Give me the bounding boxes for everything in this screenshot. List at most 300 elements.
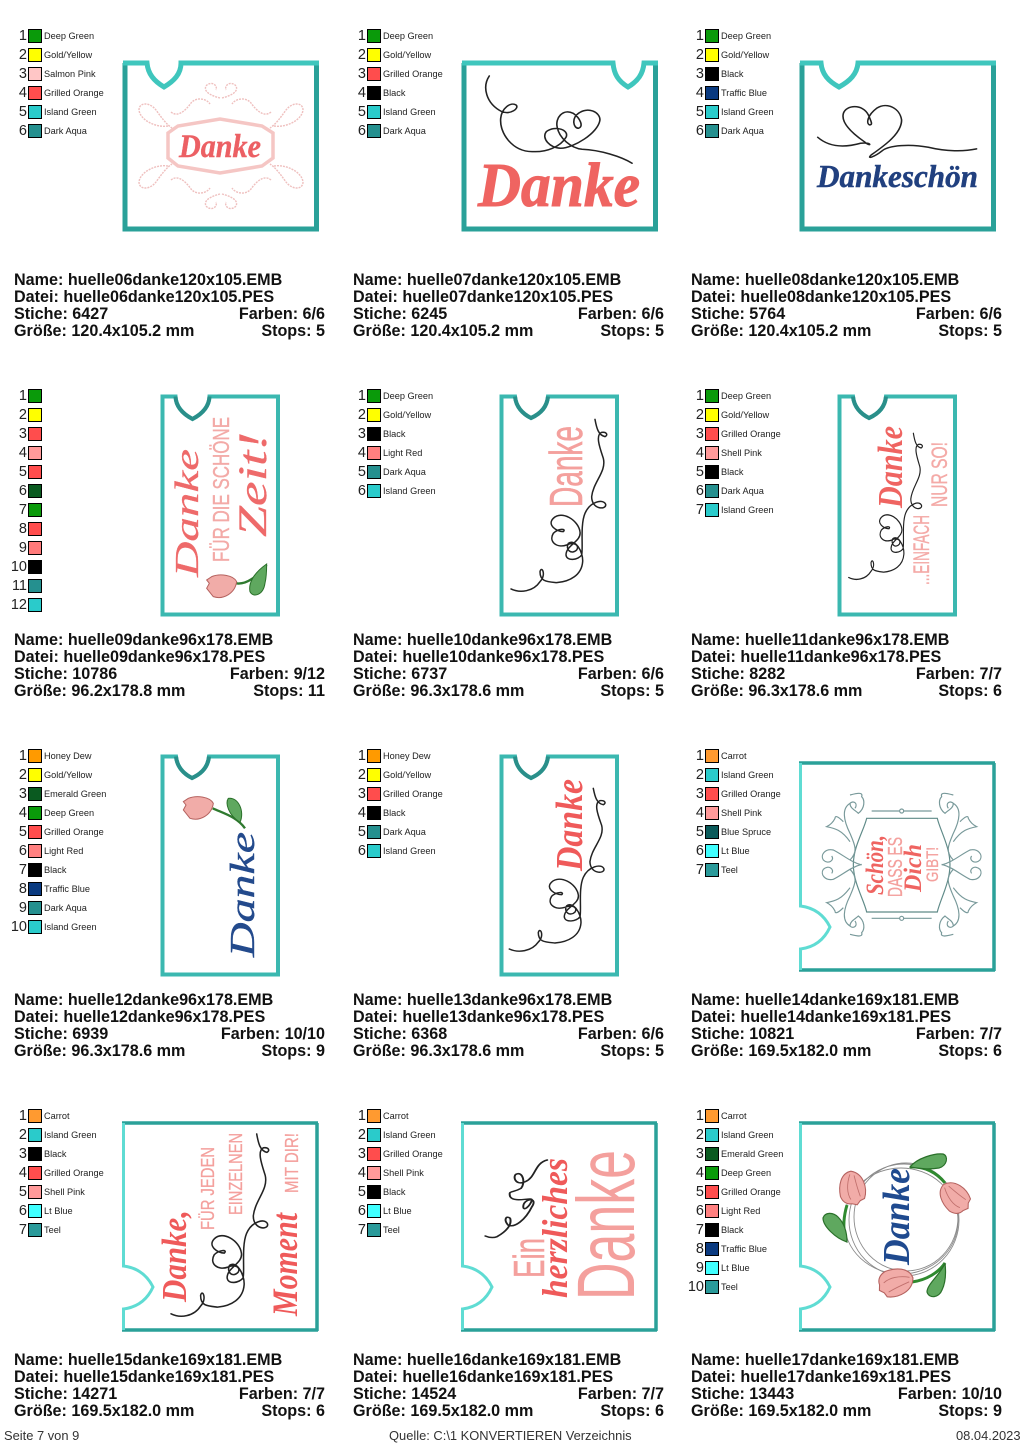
word: Danke,: Danke, xyxy=(155,1210,194,1303)
panel: huelle07danke120x105 xyxy=(353,28,664,340)
file information: Datei: huelle08danke120x105.PES xyxy=(691,288,951,306)
colour legend: Black xyxy=(383,808,405,818)
wreath stems xyxy=(844,1167,945,1282)
file information xyxy=(691,271,1002,340)
pocket frame xyxy=(461,1123,657,1331)
wreath leaves xyxy=(823,1154,946,1297)
word: Danke: Danke xyxy=(876,1168,918,1266)
text: EINZELNEN: EINZELNEN xyxy=(226,1133,246,1215)
file information: Farben: 9/12 xyxy=(230,665,325,683)
colour legend: 8 xyxy=(19,881,27,897)
file information: Größe: 96.3x178.6 mm xyxy=(353,682,524,700)
pocket frame xyxy=(502,756,617,974)
colour legend: Black xyxy=(44,1149,66,1159)
colour legend: Gold/Yellow xyxy=(721,410,769,420)
file information: Stops: 6 xyxy=(261,1402,325,1420)
file information: Datei: huelle09danke96x178.PES xyxy=(14,648,265,666)
file information: Größe: 120.4x105.2 mm xyxy=(353,322,533,340)
colour legend: 3 xyxy=(19,66,27,82)
colour legend: Dark Aqua xyxy=(44,903,87,913)
colour legend: Light Red xyxy=(44,846,83,856)
file information: Farben: 7/7 xyxy=(578,1385,664,1403)
wreath rings xyxy=(844,1163,959,1276)
embroidery design: Danke with squiggle xyxy=(500,394,619,616)
colour legend: 4 xyxy=(358,85,366,101)
ornament flourishes xyxy=(139,83,303,209)
file information: Stops: 5 xyxy=(261,322,325,340)
text: ...EINFACH: ...EINFACH xyxy=(909,515,934,585)
colour legend: 1 xyxy=(696,28,704,44)
file information xyxy=(353,631,664,700)
word: Danke: Danke xyxy=(540,426,592,507)
colour legend: Gold/Yellow xyxy=(44,50,92,60)
colour legend: 6 xyxy=(19,123,27,139)
colour legend: Grilled Orange xyxy=(383,1149,443,1159)
colour legend: 6 xyxy=(358,843,366,859)
file information: Farben: 7/7 xyxy=(239,1385,325,1403)
colour legend xyxy=(11,388,42,613)
word: Moment: Moment xyxy=(265,1212,305,1317)
colour legend: Island Green xyxy=(721,770,774,780)
footer: page number: Seite 7 von 9 xyxy=(4,1428,79,1443)
colour legend: Deep Green xyxy=(721,31,771,41)
text: FÜR DIE SCHÖNE: FÜR DIE SCHÖNE xyxy=(208,417,234,562)
colour legend: 3 xyxy=(358,1146,366,1162)
colour legend: Black xyxy=(721,69,743,79)
embroidery design: Danke für die schöne Zeit xyxy=(160,394,280,616)
colour legend: Gold/Yellow xyxy=(44,770,92,780)
colour legend: 4 xyxy=(19,805,27,821)
file information: Datei: huelle16danke169x181.PES xyxy=(353,1368,613,1386)
colour legend: Black xyxy=(383,429,405,439)
colour legend: 8 xyxy=(19,521,27,537)
colour legend: 2 xyxy=(19,1127,27,1143)
colour legend: Gold/Yellow xyxy=(383,50,431,60)
thread squiggle xyxy=(485,1160,547,1238)
file information: Größe: 96.3x178.6 mm xyxy=(14,1042,185,1060)
colour legend: Teel xyxy=(721,1282,738,1292)
colour legend xyxy=(696,388,781,518)
colour legend: Shell Pink xyxy=(44,1187,85,1197)
panel: huelle16danke169x181 xyxy=(339,1080,678,1440)
colour legend: Deep Green xyxy=(44,808,94,818)
embroidery design: Danke with tulip xyxy=(160,754,280,976)
colour legend: Light Red xyxy=(721,1206,760,1216)
embroidery design: Danke für jeden einzelnen Moment mit dir xyxy=(122,1121,319,1332)
colour legend: 5 xyxy=(358,104,366,120)
colour legend: 5 xyxy=(19,104,27,120)
panel: huelle14danke169x181 xyxy=(691,748,1002,1060)
colour legend xyxy=(358,748,443,859)
colour legend: Grilled Orange xyxy=(44,88,104,98)
colour legend: 12 xyxy=(11,597,27,613)
colour legend: 4 xyxy=(358,445,366,461)
file information: Größe: 169.5x182.0 mm xyxy=(14,1402,194,1420)
file information: Größe: 96.2x178.8 mm xyxy=(14,682,185,700)
thread squiggle xyxy=(509,788,605,951)
colour legend: Island Green xyxy=(383,107,436,117)
colour legend: Deep Green xyxy=(383,31,433,41)
colour legend: Grilled Orange xyxy=(721,1187,781,1197)
colour legend: 2 xyxy=(696,1127,704,1143)
colour legend: Gold/Yellow xyxy=(721,50,769,60)
colour legend: 9 xyxy=(696,1260,704,1276)
file information xyxy=(677,1352,1016,1422)
colour legend: 5 xyxy=(19,824,27,840)
colour legend: Emerald Green xyxy=(721,1149,783,1159)
colour legend: Traffic Blue xyxy=(44,884,90,894)
colour legend: 5 xyxy=(696,104,704,120)
colour legend: 2 xyxy=(358,407,366,423)
pocket notch xyxy=(515,756,548,778)
tulip: bottom xyxy=(876,1266,916,1299)
file information: Stops: 5 xyxy=(600,682,664,700)
text: NUR SO!: NUR SO! xyxy=(927,442,952,507)
colour legend: 1 xyxy=(696,748,704,764)
tulip: right xyxy=(934,1176,975,1218)
colour legend: 6 xyxy=(358,1203,366,1219)
colour legend: Island Green xyxy=(721,107,774,117)
thread squiggle xyxy=(849,433,922,579)
embroidery design: Danke tulip wreath xyxy=(677,1080,1016,1345)
colour legend: 7 xyxy=(19,1222,27,1238)
colour legend: 5 xyxy=(358,464,366,480)
word: Dankeschön: Dankeschön xyxy=(816,158,978,194)
colour legend xyxy=(696,28,774,139)
colour legend: 1 xyxy=(696,388,704,404)
colour legend xyxy=(11,748,106,935)
file information: Datei: huelle15danke169x181.PES xyxy=(14,1368,274,1386)
panel: huelle06danke120x105 xyxy=(14,28,325,340)
colour legend: Carrot xyxy=(44,1111,70,1121)
text: GIBT!: GIBT! xyxy=(923,847,942,882)
colour legend: 2 xyxy=(19,407,27,423)
colour legend: 7 xyxy=(696,502,704,518)
file information: Stiche: 6245 xyxy=(353,305,447,323)
colour legend: 1 xyxy=(19,28,27,44)
tulip: top left xyxy=(840,1171,866,1205)
colour legend: 7 xyxy=(358,1222,366,1238)
colour legend: Deep Green xyxy=(721,1168,771,1178)
colour legend: 11 xyxy=(12,578,27,594)
colour legend: Island Green xyxy=(383,1130,436,1140)
colour legend xyxy=(358,388,436,499)
colour legend: 2 xyxy=(19,767,27,783)
panel: huelle17danke169x181 xyxy=(677,1080,1016,1440)
file information xyxy=(339,1352,678,1422)
colour legend: Grilled Orange xyxy=(721,789,781,799)
file information xyxy=(691,991,1002,1060)
file information: Farben: 7/7 xyxy=(916,665,1002,683)
file information: Größe: 120.4x105.2 mm xyxy=(691,322,871,340)
colour legend: 2 xyxy=(19,47,27,63)
file information xyxy=(14,631,325,700)
word: Danke: Danke xyxy=(223,832,262,958)
file information: Größe: 169.5x182.0 mm xyxy=(691,1042,871,1060)
colour legend: 5 xyxy=(19,1184,27,1200)
colour legend: Island Green xyxy=(721,1130,774,1140)
embroidery design: Ein herzliches Danke xyxy=(339,1080,678,1345)
file information: Größe: 96.3x178.6 mm xyxy=(691,682,862,700)
file information: Datei: huelle07danke120x105.PES xyxy=(353,288,613,306)
colour legend: Lt Blue xyxy=(721,846,750,856)
colour legend: 6 xyxy=(19,483,27,499)
file information: Name: huelle12danke96x178.EMB xyxy=(14,991,273,1009)
colour legend: Grilled Orange xyxy=(721,429,781,439)
colour legend: 1 xyxy=(358,748,366,764)
colour legend: 6 xyxy=(358,123,366,139)
file information: Stops: 5 xyxy=(600,1042,664,1060)
colour legend: 5 xyxy=(19,464,27,480)
word: Danke: Danke xyxy=(549,779,591,872)
colour legend: Island Green xyxy=(383,846,436,856)
colour legend: 1 xyxy=(696,1108,704,1124)
file information xyxy=(691,631,1002,700)
colour legend: 10 xyxy=(688,1279,704,1295)
word: Ein: Ein xyxy=(505,1238,554,1278)
embroidery design: Dankeschön with heart xyxy=(800,60,996,232)
colour legend: Salmon Pink xyxy=(44,69,96,79)
file information: Farben: 6/6 xyxy=(916,305,1002,323)
colour legend: Shell Pink xyxy=(721,808,762,818)
colour legend xyxy=(19,28,104,139)
file information: Stiche: 8282 xyxy=(691,665,785,683)
colour legend: Black xyxy=(44,865,66,875)
colour legend: 3 xyxy=(19,786,27,802)
file information xyxy=(353,991,664,1060)
file information: Stops: 5 xyxy=(938,322,1002,340)
colour legend: Grilled Orange xyxy=(383,69,443,79)
file information: Farben: 6/6 xyxy=(578,665,664,683)
colour legend: 3 xyxy=(696,426,704,442)
embroidery design: Danke with hearts xyxy=(462,60,658,232)
file information: Stops: 5 xyxy=(600,322,664,340)
colour legend: Blue Spruce xyxy=(721,827,771,837)
file information: Datei: huelle10danke96x178.PES xyxy=(353,648,604,666)
colour legend: Dark Aqua xyxy=(383,126,426,136)
colour legend: Dark Aqua xyxy=(44,126,87,136)
file information: Datei: huelle12danke96x178.PES xyxy=(14,1008,265,1026)
file information: Stops: 6 xyxy=(938,682,1002,700)
file information: Stiche: 6427 xyxy=(14,305,108,323)
colour legend: 2 xyxy=(358,47,366,63)
file information: Farben: 10/10 xyxy=(221,1025,325,1043)
colour legend: 3 xyxy=(358,786,366,802)
panel: huelle12danke96x178 xyxy=(11,748,325,1060)
icon: tulip xyxy=(207,564,267,598)
pocket notch xyxy=(176,396,210,419)
colour legend: 4 xyxy=(19,1165,27,1181)
file information: Farben: 6/6 xyxy=(578,1025,664,1043)
file information xyxy=(353,271,664,340)
file information: Stiche: 6737 xyxy=(353,665,447,683)
ornament frame xyxy=(822,793,981,936)
colour legend: Dark Aqua xyxy=(383,467,426,477)
file information: Stiche: 13443 xyxy=(691,1385,794,1403)
colour legend: Grilled Orange xyxy=(44,1168,104,1178)
colour legend: Black xyxy=(721,467,743,477)
file information xyxy=(14,271,325,340)
file information: Datei: huelle14danke169x181.PES xyxy=(691,1008,951,1026)
colour legend: 3 xyxy=(696,1146,704,1162)
colour legend: 6 xyxy=(19,1203,27,1219)
colour legend xyxy=(696,748,781,878)
colour legend: 1 xyxy=(358,388,366,404)
colour legend: Traffic Blue xyxy=(721,88,767,98)
word: Danke: Danke xyxy=(477,152,640,220)
colour legend: 3 xyxy=(696,66,704,82)
colour legend: Honey Dew xyxy=(383,751,430,761)
pocket frame xyxy=(502,396,617,614)
colour legend: 2 xyxy=(696,767,704,783)
colour legend: 1 xyxy=(19,388,27,404)
file information: Stiche: 10821 xyxy=(691,1025,794,1043)
colour legend: 4 xyxy=(19,445,27,461)
colour legend xyxy=(339,1108,454,1343)
file information: Datei: huelle13danke96x178.PES xyxy=(353,1008,604,1026)
colour legend: Grilled Orange xyxy=(44,827,104,837)
colour legend: Carrot xyxy=(721,751,747,761)
word: Zeit!: Zeit! xyxy=(230,432,275,537)
colour legend: 1 xyxy=(358,28,366,44)
word: Danke: Danke xyxy=(871,426,910,509)
colour legend xyxy=(19,1108,104,1238)
colour legend: Carrot xyxy=(383,1111,409,1121)
colour legend: Island Green xyxy=(44,107,97,117)
colour legend: Lt Blue xyxy=(44,1206,73,1216)
colour legend: Black xyxy=(721,1225,743,1235)
file information: Stiche: 5764 xyxy=(691,305,785,323)
embroidery design: Danke ornament xyxy=(122,60,319,232)
colour legend: 3 xyxy=(19,426,27,442)
colour legend: 9 xyxy=(19,540,27,556)
file information: Stiche: 14271 xyxy=(14,1385,117,1403)
colour legend: Island Green xyxy=(383,486,436,496)
file information: Größe: 120.4x105.2 mm xyxy=(14,322,194,340)
colour legend: 2 xyxy=(696,47,704,63)
file information: Name: huelle08danke120x105.EMB xyxy=(691,271,959,289)
colour legend: 7 xyxy=(696,1222,704,1238)
colour legend: 7 xyxy=(19,862,27,878)
thread squiggle xyxy=(511,419,607,591)
embroidery design: Danke einfach nur so xyxy=(838,394,957,616)
file information: Stops: 6 xyxy=(600,1402,664,1420)
colour legend: 5 xyxy=(696,1184,704,1200)
colour legend: Teel xyxy=(44,1225,61,1235)
file information: Stops: 9 xyxy=(261,1042,325,1060)
colour legend: 6 xyxy=(19,843,27,859)
colour legend: Lt Blue xyxy=(383,1206,412,1216)
pocket frame xyxy=(799,1123,995,1331)
colour legend: Deep Green xyxy=(721,391,771,401)
footer: date: 08.04.2023 xyxy=(956,1428,1021,1443)
colour legend: 5 xyxy=(358,824,366,840)
colour legend: 10 xyxy=(11,559,27,575)
word: Danke: Danke xyxy=(561,1150,652,1300)
pocket notch xyxy=(853,396,886,418)
pocket frame xyxy=(162,756,278,974)
colour legend xyxy=(358,28,443,139)
pocket frame xyxy=(162,396,278,614)
colour legend: Teel xyxy=(383,1225,400,1235)
panel: huelle15danke169x181 xyxy=(14,1108,325,1420)
colour legend: Lt Blue xyxy=(721,1263,750,1273)
panel: huelle08danke120x105 xyxy=(691,28,1002,340)
pocket frame xyxy=(122,1123,318,1331)
file information: Name: huelle17danke169x181.EMB xyxy=(691,1351,959,1369)
colour legend: 2 xyxy=(358,767,366,783)
panel: huelle09danke96x178 xyxy=(11,388,325,700)
file information: Name: huelle10danke96x178.EMB xyxy=(353,631,612,649)
embroidery design: Schön, dass es Dich gibt xyxy=(799,761,996,972)
file information: Stiche: 10786 xyxy=(14,665,117,683)
colour legend: 3 xyxy=(696,786,704,802)
word: Dich: Dich xyxy=(900,844,927,893)
file information: Stops: 9 xyxy=(938,1402,1002,1420)
colour legend: Island Green xyxy=(44,1130,97,1140)
file information: Name: huelle09danke96x178.EMB xyxy=(14,631,273,649)
footer: source: Quelle: C:\1 KONVERTIEREN Verzeichnis xyxy=(389,1428,632,1443)
pocket frame xyxy=(799,763,995,971)
colour legend: 1 xyxy=(19,748,27,764)
colour legend: Honey Dew xyxy=(44,751,92,761)
colour legend: 4 xyxy=(19,85,27,101)
colour legend: Gold/Yellow xyxy=(383,770,431,780)
embroidery design: red Danke with squiggle xyxy=(500,754,619,976)
colour legend: Deep Green xyxy=(383,391,433,401)
colour legend: 4 xyxy=(696,805,704,821)
colour legend: 4 xyxy=(696,85,704,101)
colour legend: 5 xyxy=(358,1184,366,1200)
thread squiggle xyxy=(171,1134,269,1316)
file information: Stiche: 6939 xyxy=(14,1025,108,1043)
colour legend: 6 xyxy=(696,483,704,499)
file information: Stops: 6 xyxy=(938,1042,1002,1060)
colour legend: 4 xyxy=(358,1165,366,1181)
colour legend: Emerald Green xyxy=(44,789,106,799)
file information: Größe: 169.5x182.0 mm xyxy=(691,1402,871,1420)
colour legend: Black xyxy=(383,1187,405,1197)
word: herzliches: herzliches xyxy=(535,1158,575,1298)
colour legend xyxy=(677,1108,792,1343)
file information: Datei: huelle11danke96x178.PES xyxy=(691,648,941,666)
file information: Stiche: 6368 xyxy=(353,1025,447,1043)
colour legend: Black xyxy=(383,88,405,98)
colour legend: Shell Pink xyxy=(383,1168,424,1178)
file information: Datei: huelle06danke120x105.PES xyxy=(14,288,274,306)
colour legend: 9 xyxy=(19,900,27,916)
colour legend: Island Green xyxy=(721,505,774,515)
file information: Farben: 7/7 xyxy=(916,1025,1002,1043)
pocket notch xyxy=(515,396,548,418)
text: DASS ES: DASS ES xyxy=(885,837,907,897)
label plate xyxy=(168,119,273,173)
text: FÜR JEDEN: FÜR JEDEN xyxy=(198,1147,218,1230)
file information: Name: huelle11danke96x178.EMB xyxy=(691,631,949,649)
file information xyxy=(14,991,325,1060)
pocket frame xyxy=(840,396,955,614)
pocket frame xyxy=(123,63,319,229)
file information: Name: huelle15danke169x181.EMB xyxy=(14,1351,282,1369)
colour legend: 10 xyxy=(11,919,27,935)
file information: Name: huelle06danke120x105.EMB xyxy=(14,271,282,289)
panel: huelle13danke96x178 xyxy=(353,748,664,1060)
file information: Größe: 96.3x178.6 mm xyxy=(353,1042,524,1060)
icon: tulip xyxy=(183,797,245,828)
text: MIT DIR!: MIT DIR! xyxy=(282,1133,302,1193)
colour legend: 7 xyxy=(696,862,704,878)
colour legend: Dark Aqua xyxy=(383,827,426,837)
